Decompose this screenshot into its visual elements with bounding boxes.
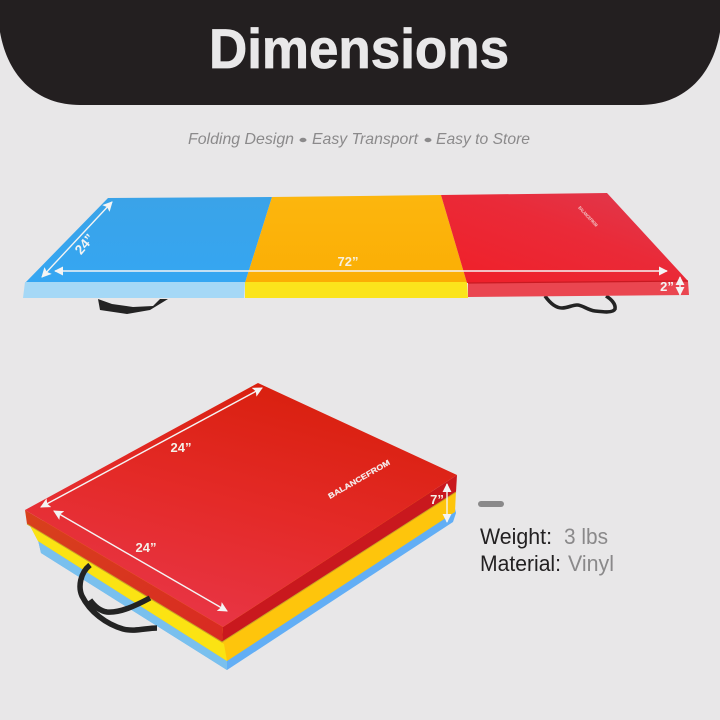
weight: [480, 524, 608, 549]
dimension: top 24 inch: [41, 388, 262, 507]
red layer: [25, 383, 457, 642]
material: Material:: [480, 551, 561, 576]
dimension: 24 inch width: 24”: [72, 231, 97, 257]
accent pill: [478, 501, 504, 507]
dimension: top 24 inch: 24”: [171, 440, 191, 455]
tagline: Easy to Store: [436, 131, 530, 148]
handle strap: [80, 565, 157, 630]
handle: right strap: [545, 296, 615, 312]
blue layer: [38, 500, 456, 670]
dimension: 7 inch folded height: 7”: [430, 492, 444, 507]
dimension: 72 inch length: 72”: [338, 254, 358, 269]
yellow panel: [245, 195, 468, 298]
material: [480, 551, 614, 576]
folded mat: [25, 383, 457, 670]
weight: 3 lbs: [564, 524, 608, 549]
dimension: front 24 inch: 24”: [136, 540, 156, 555]
blue panel: [23, 197, 272, 298]
yellow layer: [28, 490, 456, 661]
material: Vinyl: [568, 551, 614, 576]
brand mark: BALANCEFROM: [577, 205, 599, 228]
unfolded mat: [23, 193, 689, 314]
header banner: [0, 0, 720, 105]
dimension: 24 inch width: [42, 202, 112, 277]
brand mark: BALANCEFROM: [326, 458, 392, 501]
red panel: [441, 193, 689, 297]
dimension: front 24 inch: [54, 511, 227, 611]
weight: Weight:: [480, 524, 552, 549]
title: Dimensions: [209, 17, 509, 80]
tagline: Easy Transport: [312, 131, 419, 148]
specifications: [478, 501, 614, 576]
dimension: 7 inch folded height: [430, 484, 447, 522]
tagline: [188, 131, 530, 148]
dimension: 2 inch thickness: 2”: [660, 279, 674, 294]
handle: left strap: [98, 299, 168, 314]
dimension: 2 inch thickness: [660, 277, 680, 295]
tagline: Folding Design: [188, 131, 294, 148]
